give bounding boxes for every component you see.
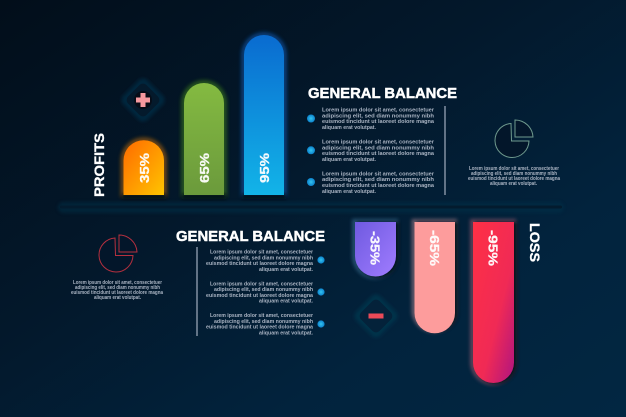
text block 3	[307, 171, 434, 195]
bar: -35%	[352, 219, 399, 279]
heading: profits: PROFITS	[92, 133, 107, 197]
caption: adipiscing elit, sed diam nonummy nibh	[75, 285, 160, 291]
heading: general balance: GENERAL BALANCE	[308, 86, 457, 102]
text block 3: euismod tincidunt ut laoreet dolore magna	[322, 183, 434, 189]
caption: adipiscing elit, sed diam nonummy nibh	[471, 171, 557, 177]
bar: -65%: -65%	[427, 230, 442, 267]
bar: 35%: 35%	[137, 153, 152, 183]
icon: pie chart red	[99, 235, 137, 272]
icon: plus diamond	[119, 76, 167, 124]
text block 1: euismod tincidunt ut laoreet dolore magna	[322, 119, 434, 125]
text block 3: adipiscing elit, sed diam nonummy nibh	[214, 319, 313, 325]
text block 2	[206, 281, 325, 304]
caption: euismod tincidunt ut laoreet dolore magna	[468, 176, 560, 182]
bar: 65%: 65%	[197, 153, 212, 183]
text block 1: adipiscing elit, sed diam nonummy nibh	[322, 113, 434, 119]
caption: euismod tincidunt ut laoreet dolore magna	[71, 290, 163, 296]
caption	[71, 280, 163, 301]
text block 2: adipiscing elit, sed diam nonummy nibh	[322, 145, 434, 151]
icon: minus diamond	[352, 292, 400, 340]
panel: general balance lower	[71, 229, 325, 336]
text block 3: euismod tincidunt ut laoreet dolore magna	[206, 324, 313, 330]
text block 3: Lorem ipsum dolor sit amet, consectetuer	[210, 313, 313, 319]
bar: 65%	[181, 80, 227, 199]
bar: 95%: 95%	[257, 153, 272, 183]
text block 1	[307, 108, 434, 131]
bar: -95%: -95%	[486, 230, 500, 267]
panel: general balance upper	[307, 86, 560, 195]
bar: -95%	[470, 219, 517, 385]
caption: Lorem ipsum dolor sit amet, consectetuer	[469, 166, 559, 172]
panel: loss chart	[352, 219, 542, 385]
text block 2: adipiscing elit, sed diam nonummy nibh	[214, 287, 313, 293]
text block 1: euismod tincidunt ut laoreet dolore magna	[206, 261, 313, 267]
text block 2: aliquam erat volutpat.	[259, 298, 314, 304]
center axis line	[58, 202, 564, 213]
bar: 95%	[241, 32, 287, 199]
text block 2: euismod tincidunt ut laoreet dolore magna	[322, 151, 434, 157]
panel: profits chart	[92, 32, 287, 199]
heading: loss: LOSS	[527, 223, 542, 262]
text block 1: Lorem ipsum dolor sit amet, consectetuer	[322, 108, 434, 114]
text block 1	[206, 250, 325, 273]
text block 2: Lorem ipsum dolor sit amet, consectetuer	[322, 140, 434, 146]
divider	[196, 247, 198, 336]
heading: general balance: GENERAL BALANCE	[176, 229, 325, 245]
text block 2: euismod tincidunt ut laoreet dolore magna	[206, 293, 313, 299]
caption: Lorem ipsum dolor sit amet, consectetuer	[73, 280, 162, 286]
text block 3: adipiscing elit, sed diam nonummy nibh	[322, 177, 434, 183]
bar: -35%: -35%	[368, 231, 382, 265]
text block 3	[206, 313, 325, 336]
text block 3: Lorem ipsum dolor sit amet, consectetuer	[322, 171, 434, 177]
text block 3: aliquam erat volutpat.	[322, 189, 377, 195]
text block 1: adipiscing elit, sed diam nonummy nibh	[214, 255, 313, 261]
text block 2: Lorem ipsum dolor sit amet, consectetuer	[210, 281, 313, 287]
text block 1: aliquam erat volutpat.	[322, 125, 377, 131]
bar: -65%	[412, 219, 458, 333]
text block 3: aliquam erat volutpat.	[259, 330, 314, 336]
bar: 35%	[120, 137, 167, 199]
text block 1: Lorem ipsum dolor sit amet, consectetuer	[210, 250, 313, 256]
caption	[468, 166, 560, 187]
divider	[444, 106, 446, 195]
icon: pie chart green	[495, 120, 533, 157]
text block 2: aliquam erat volutpat.	[322, 157, 377, 163]
caption: aliquam erat volutpat.	[490, 181, 538, 187]
text block 1: aliquam erat volutpat.	[259, 267, 314, 273]
caption: aliquam erat volutpat.	[94, 295, 142, 301]
text block 2	[307, 140, 434, 163]
